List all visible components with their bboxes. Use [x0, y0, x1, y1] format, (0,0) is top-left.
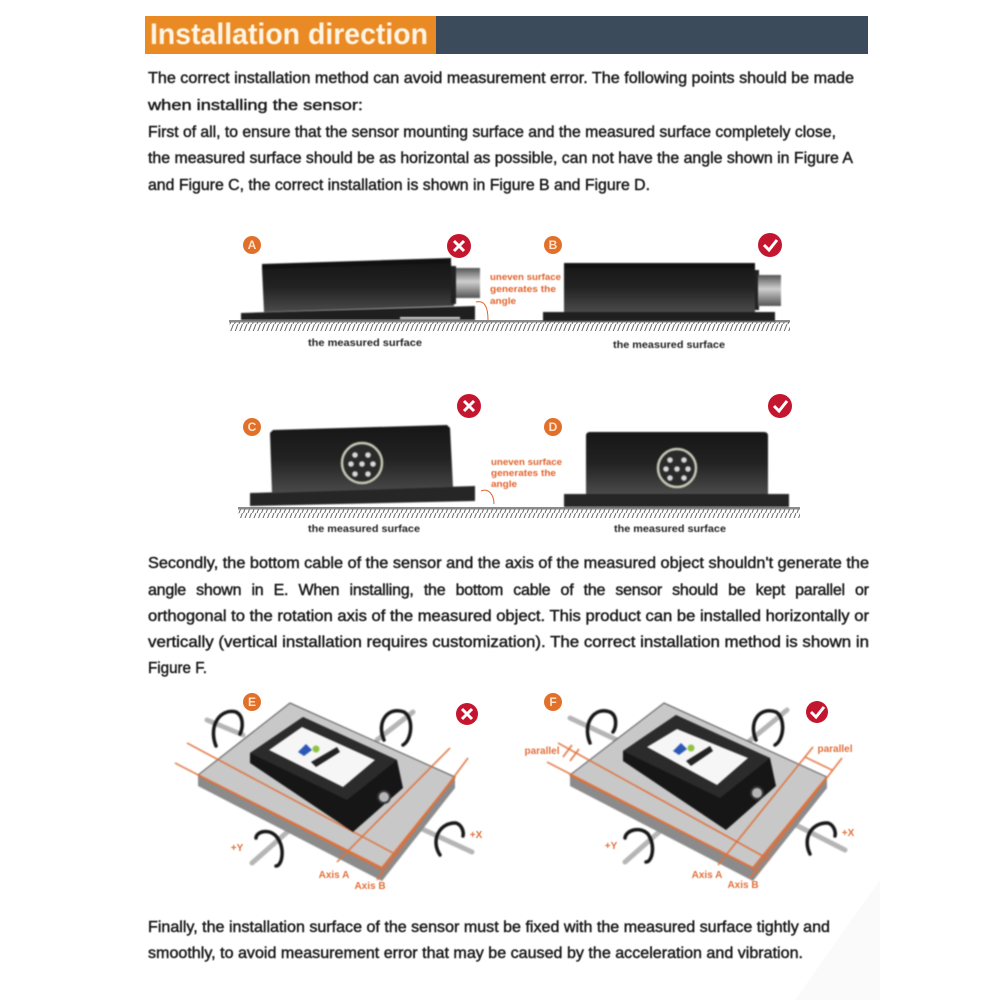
intro text block: The correct installation method can avoid measurement error. The following points should be made [148, 70, 854, 87]
icon: badge E [243, 693, 261, 711]
middle text block: Figure F. [148, 660, 207, 677]
axis labels E: +Y [231, 843, 244, 854]
axis labels E [231, 830, 483, 892]
axis labels E: Axis B [354, 881, 386, 892]
middle text block: Secondly, the bottom cable of the sensor and the axis of the measured object shouldn't generate the [148, 555, 869, 572]
label: measured surface B: the measured surface [613, 339, 725, 351]
callout: uneven surface C: generates the [491, 468, 556, 478]
icon: badge F: F [549, 695, 557, 709]
icon: badge D [544, 418, 562, 436]
figure A: tilted sensor, side view [241, 258, 480, 320]
callout: uneven surface C: uneven surface [491, 457, 562, 467]
callout: uneven surface C [481, 457, 562, 504]
icon: cross A [447, 234, 471, 258]
label: measured surface C: the measured surface [308, 523, 420, 535]
icon: badge C [243, 418, 261, 436]
middle text block: vertically (vertical installation requires customization). The correct installation method is shown in [148, 634, 869, 651]
axis labels F: Axis A [692, 870, 722, 881]
figure E: incorrect 3D mounting [175, 703, 472, 881]
label: measured surface A: the measured surface [308, 337, 422, 349]
callout: uneven surface A: generates the [490, 284, 556, 294]
callout: uneven surface A [476, 272, 561, 320]
label: measured surface D: the measured surface [614, 523, 726, 535]
icon: badge F [544, 693, 562, 711]
callout: uneven surface A: angle [490, 296, 516, 306]
axis labels F: +X [842, 828, 855, 839]
intro text block: and Figure C, the correct installation is shown in Figure B and Figure D. [148, 177, 650, 194]
figure B: level sensor, side view [543, 263, 781, 321]
title banner: Installation direction [150, 18, 428, 51]
closing text block [148, 919, 830, 962]
icon: tick D [768, 394, 792, 418]
icon: badge A [243, 236, 261, 254]
intro text block: First of all, to ensure that the sensor mounting surface and the measured surface completely close, [148, 124, 836, 141]
intro text block [147, 70, 854, 194]
middle text block: angle shown in E. When installing, the bottom cable of the sensor should be kept parallel or [148, 582, 870, 599]
closing text block: Finally, the installation surface of the sensor must be fixed with the measured surface tightly and [148, 919, 830, 936]
icon: badge D: D [549, 420, 558, 434]
icon: tick F [806, 701, 828, 723]
axis labels F: parallel [524, 746, 560, 757]
title banner [145, 16, 868, 54]
callout: uneven surface C: angle [491, 479, 517, 489]
ground line: figures C and D [238, 507, 800, 518]
middle text block: orthogonal to the rotation axis of the measured object. This product can be installed horizontally or [148, 608, 870, 625]
axis labels F: +Y [605, 841, 618, 852]
ground line: figures A and B [229, 320, 790, 331]
axis labels E: Axis A [319, 870, 349, 881]
axis labels F: parallel [817, 744, 853, 755]
figure F: correct 3D mounting [547, 703, 845, 881]
icon: badge B [544, 236, 562, 254]
axis labels E: +X [470, 830, 483, 841]
background corner shade [795, 880, 880, 1000]
intro text block: when installing the sensor: [147, 97, 363, 114]
callout: uneven surface A: uneven surface [490, 272, 561, 282]
intro text block: the measured surface should be as horizontal as possible, can not have the angle shown in Figure A [148, 150, 853, 167]
axis labels F: Axis B [727, 880, 759, 891]
icon: badge E: E [248, 695, 256, 709]
axis labels F [524, 744, 855, 891]
middle text block [148, 555, 870, 677]
icon: tick B [758, 233, 782, 257]
icon: cross C [457, 394, 481, 418]
icon: badge A: A [248, 238, 257, 252]
icon: badge B: B [549, 238, 558, 252]
closing text block: smoothly, to avoid measurement error that may be caused by the acceleration and vibration. [148, 945, 803, 962]
icon: badge C: C [248, 420, 257, 434]
icon: cross E [456, 703, 478, 725]
figure D: level sensor, connector view [564, 432, 789, 507]
figure C: tilted sensor, connector view [250, 425, 475, 506]
